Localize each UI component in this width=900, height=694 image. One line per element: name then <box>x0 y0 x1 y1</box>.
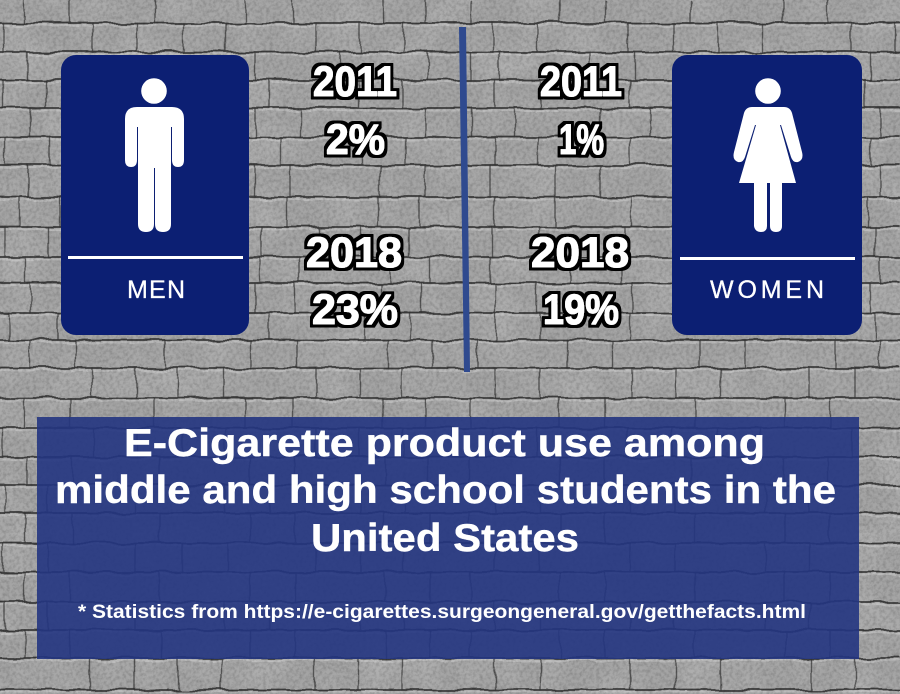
statistics: men: 2011 <box>313 58 397 106</box>
statistics: men: 23% <box>312 286 398 334</box>
heading: E-Cigarette product use among <box>124 422 765 465</box>
statistics: men: 2018 <box>306 229 402 277</box>
label: women: WOMEN <box>710 276 824 304</box>
sign: men <box>61 55 249 335</box>
statistics: women: 2011 <box>540 58 622 106</box>
heading: United States <box>311 517 579 560</box>
icon: man figure <box>125 78 184 232</box>
source note: * Statistics from https://e-cigarettes.surgeongeneral.gov/getthefacts.html <box>78 602 806 623</box>
heading <box>55 422 836 560</box>
panel: caption <box>37 417 859 659</box>
heading: middle and high school students in the <box>55 469 836 512</box>
statistics: women <box>531 58 629 334</box>
divider line <box>459 27 470 372</box>
label: men: MEN <box>127 276 185 304</box>
statistics: women: 2018 <box>531 229 629 277</box>
icon: woman figure <box>734 78 802 232</box>
statistics: women: 19% <box>543 286 619 334</box>
statistics: women: 1% <box>559 116 604 164</box>
statistics: men: 2% <box>326 116 385 164</box>
statistics: men <box>306 58 402 334</box>
sign: women <box>672 55 862 335</box>
